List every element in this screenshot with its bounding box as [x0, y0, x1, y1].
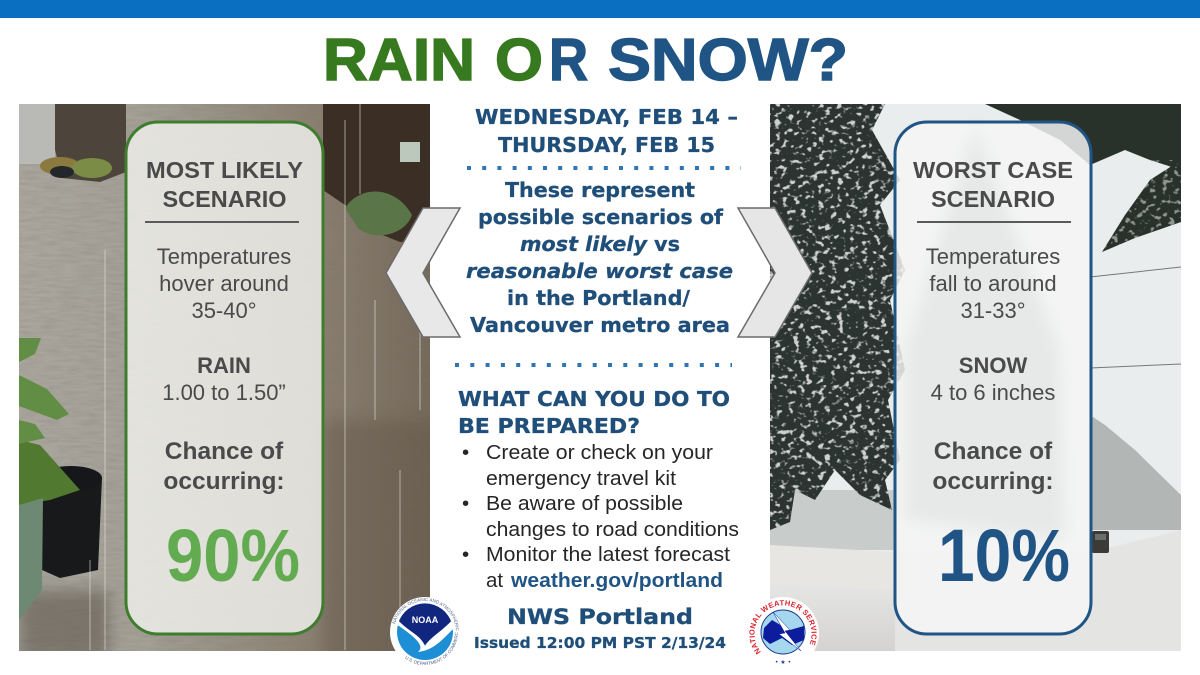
- probability: 10 percent: 10%: [938, 514, 1070, 597]
- temperature text: Temperatures: [926, 244, 1060, 269]
- photo: snowy road with fir trees: [770, 104, 1181, 651]
- scenario explanation: vs: [654, 232, 680, 256]
- preparedness bullet list: Monitor the latest forecast: [486, 543, 730, 566]
- heading: most likely scenario: SCENARIO: [162, 186, 286, 212]
- icon: NOAA logo: NOAA: [412, 615, 439, 625]
- preparedness heading: WHAT CAN YOU DO TO: [458, 387, 730, 411]
- preparedness heading: BE PREPARED?: [458, 414, 640, 438]
- temperature text: 31-33°: [960, 298, 1026, 323]
- icon: National Weather Service logo: • ★ •: [775, 659, 791, 666]
- preparedness bullet list: •: [462, 441, 469, 464]
- preparedness bullet list: Be aware of possible: [486, 492, 683, 515]
- scenario explanation: most likely: [520, 232, 649, 256]
- faint fir tree seen through the panel: [908, 147, 1062, 535]
- title: R: [549, 27, 588, 93]
- preparedness bullet list: emergency travel kit: [486, 467, 676, 490]
- chance of occurring label: occurring:: [163, 468, 285, 495]
- heading: worst case scenario: SCENARIO: [931, 186, 1055, 212]
- temperature text: fall to around: [929, 271, 1057, 296]
- heading: worst case scenario: WORST CASE: [913, 157, 1073, 183]
- scenario explanation: in the Portland/: [507, 286, 691, 310]
- date heading: THURSDAY, FEB 15: [498, 133, 715, 157]
- icon: NOAA logo: NATIONAL OCEANIC AND ATMOSPHERIC ADMINISTRATION: [392, 598, 459, 631]
- preparedness bullet list: •: [462, 492, 469, 515]
- photo: flooded street in heavy rain: [19, 104, 443, 675]
- preparedness bullet list: changes to road conditions: [486, 518, 739, 541]
- icon: NOAA logo: [390, 597, 459, 665]
- chance of occurring label: Chance of: [165, 438, 284, 465]
- panel: most likely scenario: [126, 122, 323, 634]
- title: O: [495, 27, 543, 93]
- icon: NOAA logo: U.S. DEPARTMENT OF COMMERCE: [405, 632, 458, 665]
- scenario explanation: Vancouver metro area: [470, 313, 730, 337]
- top banner bar: [0, 0, 1200, 18]
- title: RAIN: [323, 27, 475, 93]
- probability: 90 percent: 90%: [166, 514, 300, 597]
- icon: National Weather Service logo: NATIONAL WEATHER SERVICE: [749, 600, 817, 655]
- preparedness bullet list: Create or check on your: [486, 441, 713, 464]
- rain amount: RAIN: [197, 353, 251, 378]
- right chevron arrow: [738, 208, 812, 337]
- heading: most likely scenario: MOST LIKELY: [146, 157, 303, 183]
- panel: worst case scenario: [895, 122, 1091, 634]
- scenario explanation: possible scenarios of: [478, 205, 724, 229]
- chance of occurring label: occurring:: [932, 468, 1054, 495]
- chance of occurring label: Chance of: [934, 438, 1053, 465]
- scenario explanation: reasonable worst case: [466, 259, 733, 283]
- preparedness bullet list: weather.gov/portland: [510, 569, 723, 592]
- issued time: Issued 12:00 PM PST 2/13/24: [474, 634, 726, 652]
- rain amount: 1.00 to 1.50”: [162, 380, 286, 405]
- office name: NWS Portland: [507, 605, 693, 629]
- snow amount: SNOW: [959, 353, 1027, 378]
- preparedness bullet list: •: [462, 543, 469, 566]
- temperature text: Temperatures: [157, 244, 291, 269]
- preparedness bullet list: at: [486, 569, 509, 592]
- temperature text: hover around: [159, 271, 289, 296]
- title: SNOW?: [608, 27, 848, 93]
- center white panel: [430, 104, 770, 651]
- snow amount: 4 to 6 inches: [931, 380, 1055, 405]
- left chevron arrow: [386, 208, 460, 337]
- date heading: WEDNESDAY, FEB 14 –: [475, 105, 738, 129]
- temperature text: 35-40°: [191, 298, 257, 323]
- scenario explanation: These represent: [505, 178, 695, 202]
